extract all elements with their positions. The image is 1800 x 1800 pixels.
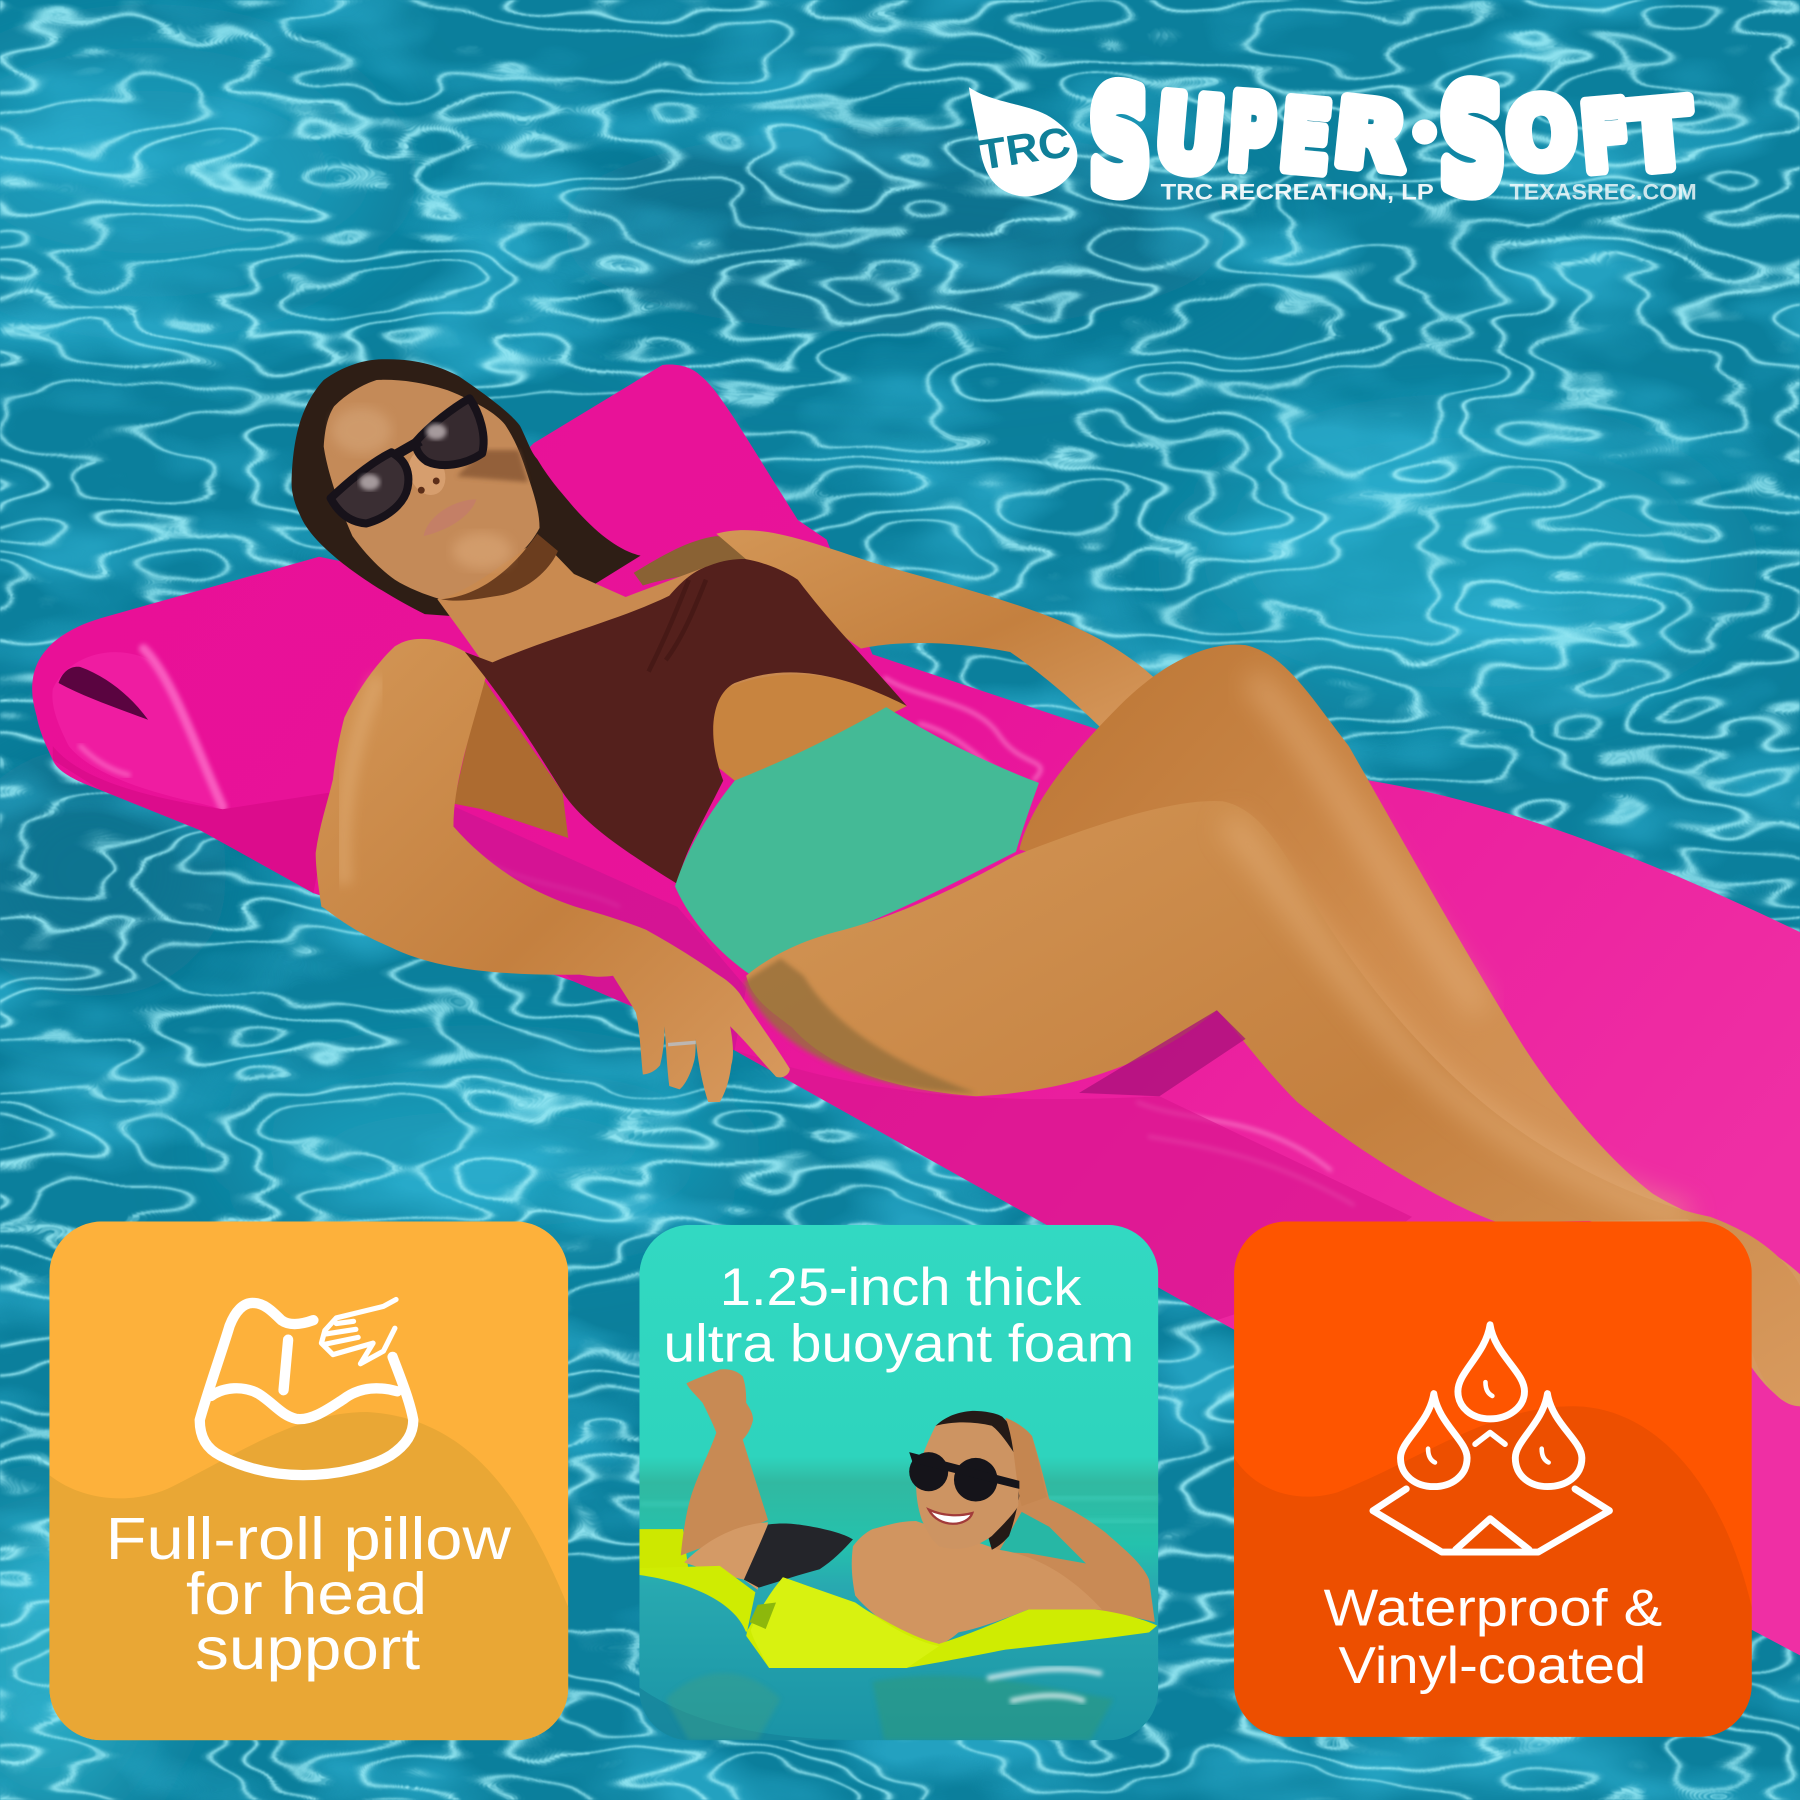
hair xyxy=(292,359,641,620)
logo wordmark xyxy=(1089,60,1696,224)
near leg xyxy=(746,801,1800,1406)
green swimsuit bottom xyxy=(675,707,1039,976)
woman on float xyxy=(292,359,1800,1406)
back of green float xyxy=(640,1529,688,1568)
panel text xyxy=(1324,1579,1662,1694)
pillow specular edge xyxy=(143,649,223,807)
blonde wet hair strands xyxy=(634,536,800,585)
panel text: Full-roll pillow xyxy=(106,1505,512,1572)
brown swimsuit top xyxy=(465,559,907,884)
float main body xyxy=(32,364,1800,1655)
pillow roll hole xyxy=(59,667,148,720)
logo wordmark: R xyxy=(1329,79,1412,192)
logo centre dot xyxy=(1412,119,1437,145)
icon: pillow with hand xyxy=(200,1299,413,1475)
logo wordmark: F xyxy=(1577,81,1635,193)
water reflections xyxy=(987,1669,1102,1701)
neck shadow xyxy=(441,534,558,601)
panel: waterproof xyxy=(1234,1221,1752,1737)
panel text: for head xyxy=(186,1560,427,1627)
logo drop with TRC: TRC xyxy=(976,118,1074,179)
leg highlights xyxy=(1228,821,1688,1217)
smile xyxy=(929,1510,972,1524)
face xyxy=(324,380,540,599)
hip xyxy=(684,1522,768,1590)
logo wordmark: S xyxy=(1440,60,1505,224)
logo small text: TRC RECREATION, LP xyxy=(1161,180,1434,205)
torso and near arm xyxy=(852,1521,1102,1644)
nose xyxy=(402,445,452,501)
submerged hip ripple xyxy=(744,959,976,1093)
lips xyxy=(424,499,476,536)
logo wordmark: S xyxy=(1089,61,1150,223)
panel background xyxy=(1234,1221,1752,1737)
panel: full-roll pillow xyxy=(49,1221,568,1740)
logo wordmark: O xyxy=(1504,77,1580,191)
logo wordmark: E xyxy=(1276,81,1336,195)
pink foam float xyxy=(32,364,1800,1655)
pillow side xyxy=(53,746,333,893)
logo wordmark: P xyxy=(1224,73,1279,194)
water gap between arm and back xyxy=(999,1512,1086,1564)
hand on head xyxy=(1006,1418,1047,1506)
logo small text: TEXASREC.COM xyxy=(1510,180,1697,205)
icon: water drops and coated layer xyxy=(1373,1325,1609,1552)
panel background xyxy=(49,1221,568,1740)
hair xyxy=(936,1411,1023,1550)
panel text: ultra buoyant foam xyxy=(664,1314,1134,1373)
far leg xyxy=(1019,645,1800,1406)
panel text: Waterproof & xyxy=(1324,1579,1662,1637)
far arm xyxy=(716,530,1173,735)
face xyxy=(916,1422,1019,1549)
sunglasses xyxy=(331,398,484,523)
photo of woman on green float xyxy=(639,1225,1158,1740)
midriff xyxy=(706,674,907,781)
wet reflections on float xyxy=(471,677,1355,1205)
black swimsuit xyxy=(744,1524,853,1588)
panel text xyxy=(664,1258,1134,1373)
panel text: Vinyl-coated xyxy=(1339,1636,1646,1694)
logo wordmark: U xyxy=(1150,73,1229,197)
panel text xyxy=(106,1505,512,1682)
logo: TRC Super-Soft xyxy=(969,60,1697,224)
sunglasses xyxy=(909,1452,1019,1502)
logo wordmark: T xyxy=(1620,81,1696,193)
raised legs and foot xyxy=(681,1369,768,1555)
pillow end face xyxy=(52,652,223,809)
near arm and hand xyxy=(316,639,790,1102)
logo small text xyxy=(1161,180,1697,205)
green float xyxy=(639,1566,1157,1668)
panel text: 1.25-inch thick xyxy=(720,1258,1082,1317)
back and far arm xyxy=(987,1418,1155,1622)
panel text: support xyxy=(195,1615,421,1682)
neck and chest xyxy=(437,540,895,804)
sunglass shadow on cheek xyxy=(457,450,528,482)
forehead and cheek highlights xyxy=(332,408,391,453)
logo drop with TRC xyxy=(969,87,1077,196)
pool water ripples xyxy=(639,1498,1158,1521)
panel: thick buoyant foam xyxy=(639,1225,1158,1740)
